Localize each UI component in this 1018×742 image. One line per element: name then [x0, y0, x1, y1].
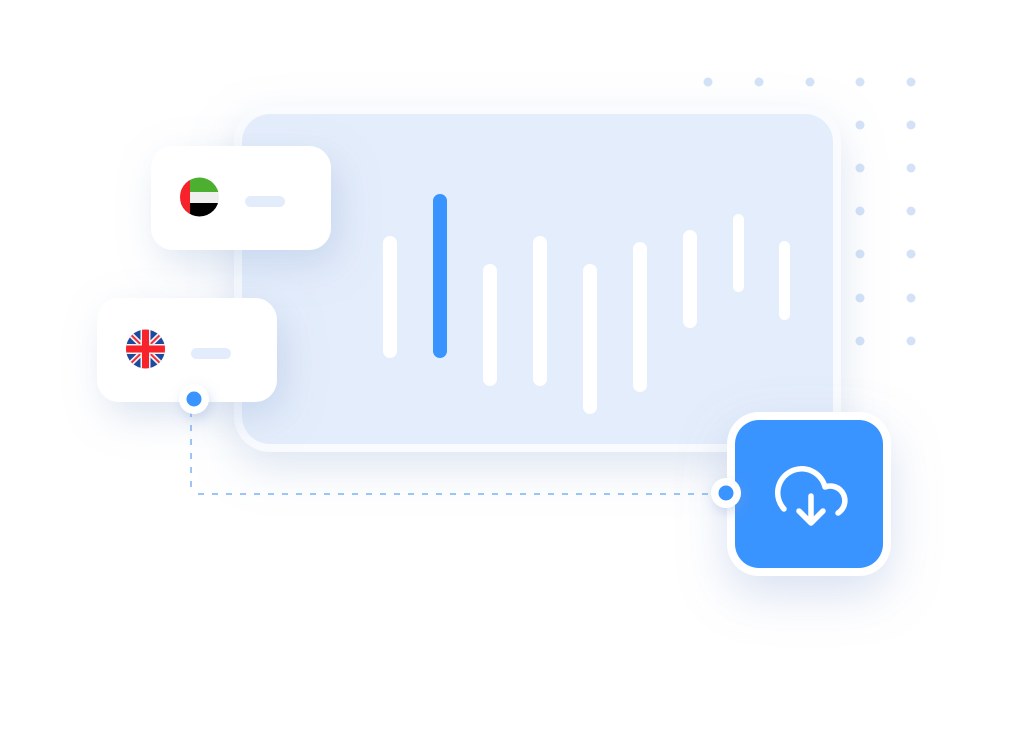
card: UK language: [97, 298, 277, 402]
card: UAE language: [151, 146, 331, 250]
connector node: UK card: [179, 384, 209, 414]
label placeholder pill: [191, 348, 231, 359]
download box: [727, 412, 891, 576]
icon: cloud download: [778, 469, 845, 523]
dashed connector: [191, 411, 712, 494]
icon: UAE flag: [180, 177, 220, 218]
label placeholder pill: [245, 196, 285, 207]
icon: UK flag: [125, 329, 166, 369]
dot grid decoration: [704, 78, 916, 346]
bar chart: [383, 194, 790, 414]
connector node: download box: [711, 478, 741, 508]
panel: main chart panel: [234, 106, 841, 452]
